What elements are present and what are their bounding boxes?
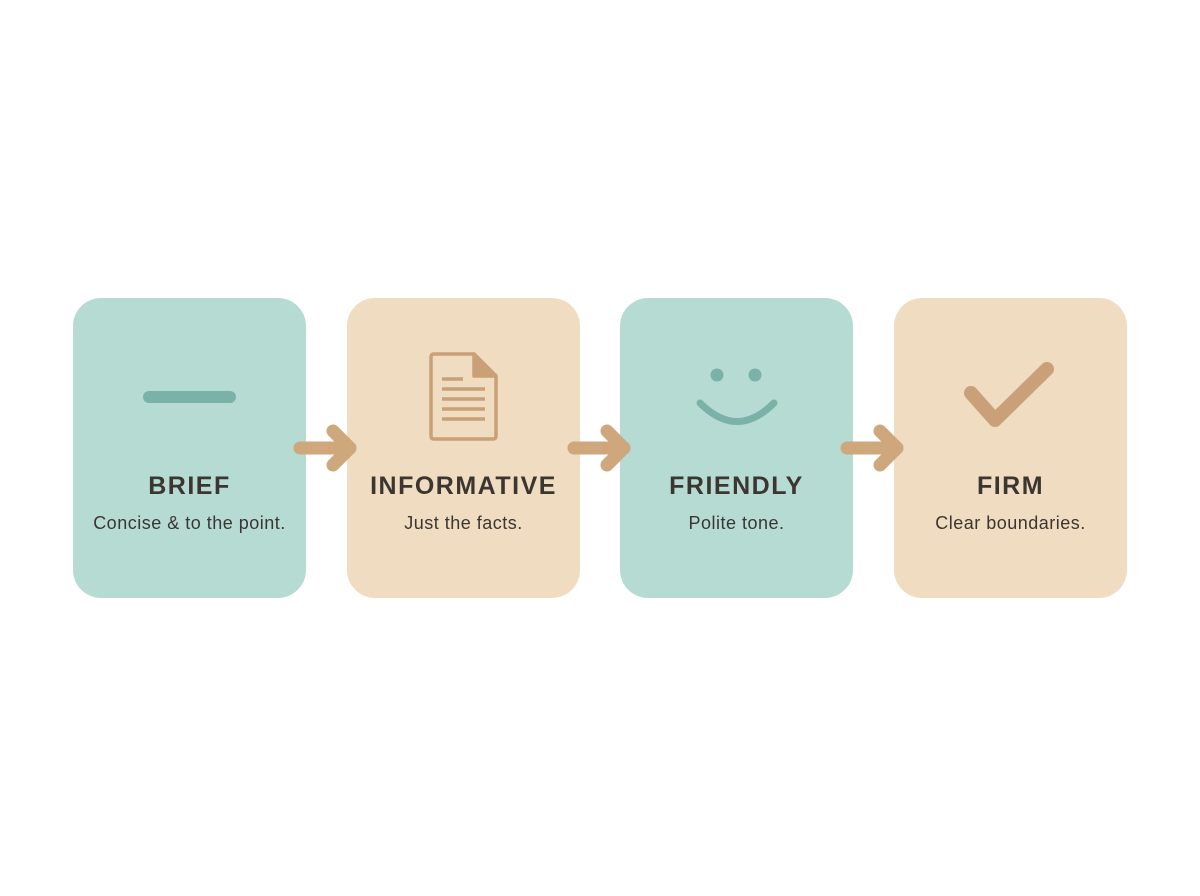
icon: checkmark xyxy=(971,369,1047,420)
card: firm xyxy=(894,298,1127,598)
icon: smile xyxy=(700,368,774,422)
text: friendly: Polite tone. xyxy=(688,513,785,533)
icon: document xyxy=(431,354,496,439)
text: informative: Just the facts. xyxy=(404,513,523,533)
heading: brief: BRIEF xyxy=(148,472,231,500)
card: friendly xyxy=(620,298,853,598)
heading: friendly: FRIENDLY xyxy=(669,472,804,500)
card: informative xyxy=(347,298,580,598)
icon: dash xyxy=(149,391,230,403)
arrow 3 xyxy=(847,431,897,465)
card: brief xyxy=(73,298,306,598)
arrow 2 xyxy=(574,431,624,465)
text: brief: Concise & to the point. xyxy=(93,513,286,533)
heading: firm: FIRM xyxy=(977,472,1044,500)
arrow 1 xyxy=(300,431,350,465)
text: firm: Clear boundaries. xyxy=(935,513,1086,533)
heading: informative: INFORMATIVE xyxy=(370,472,557,500)
